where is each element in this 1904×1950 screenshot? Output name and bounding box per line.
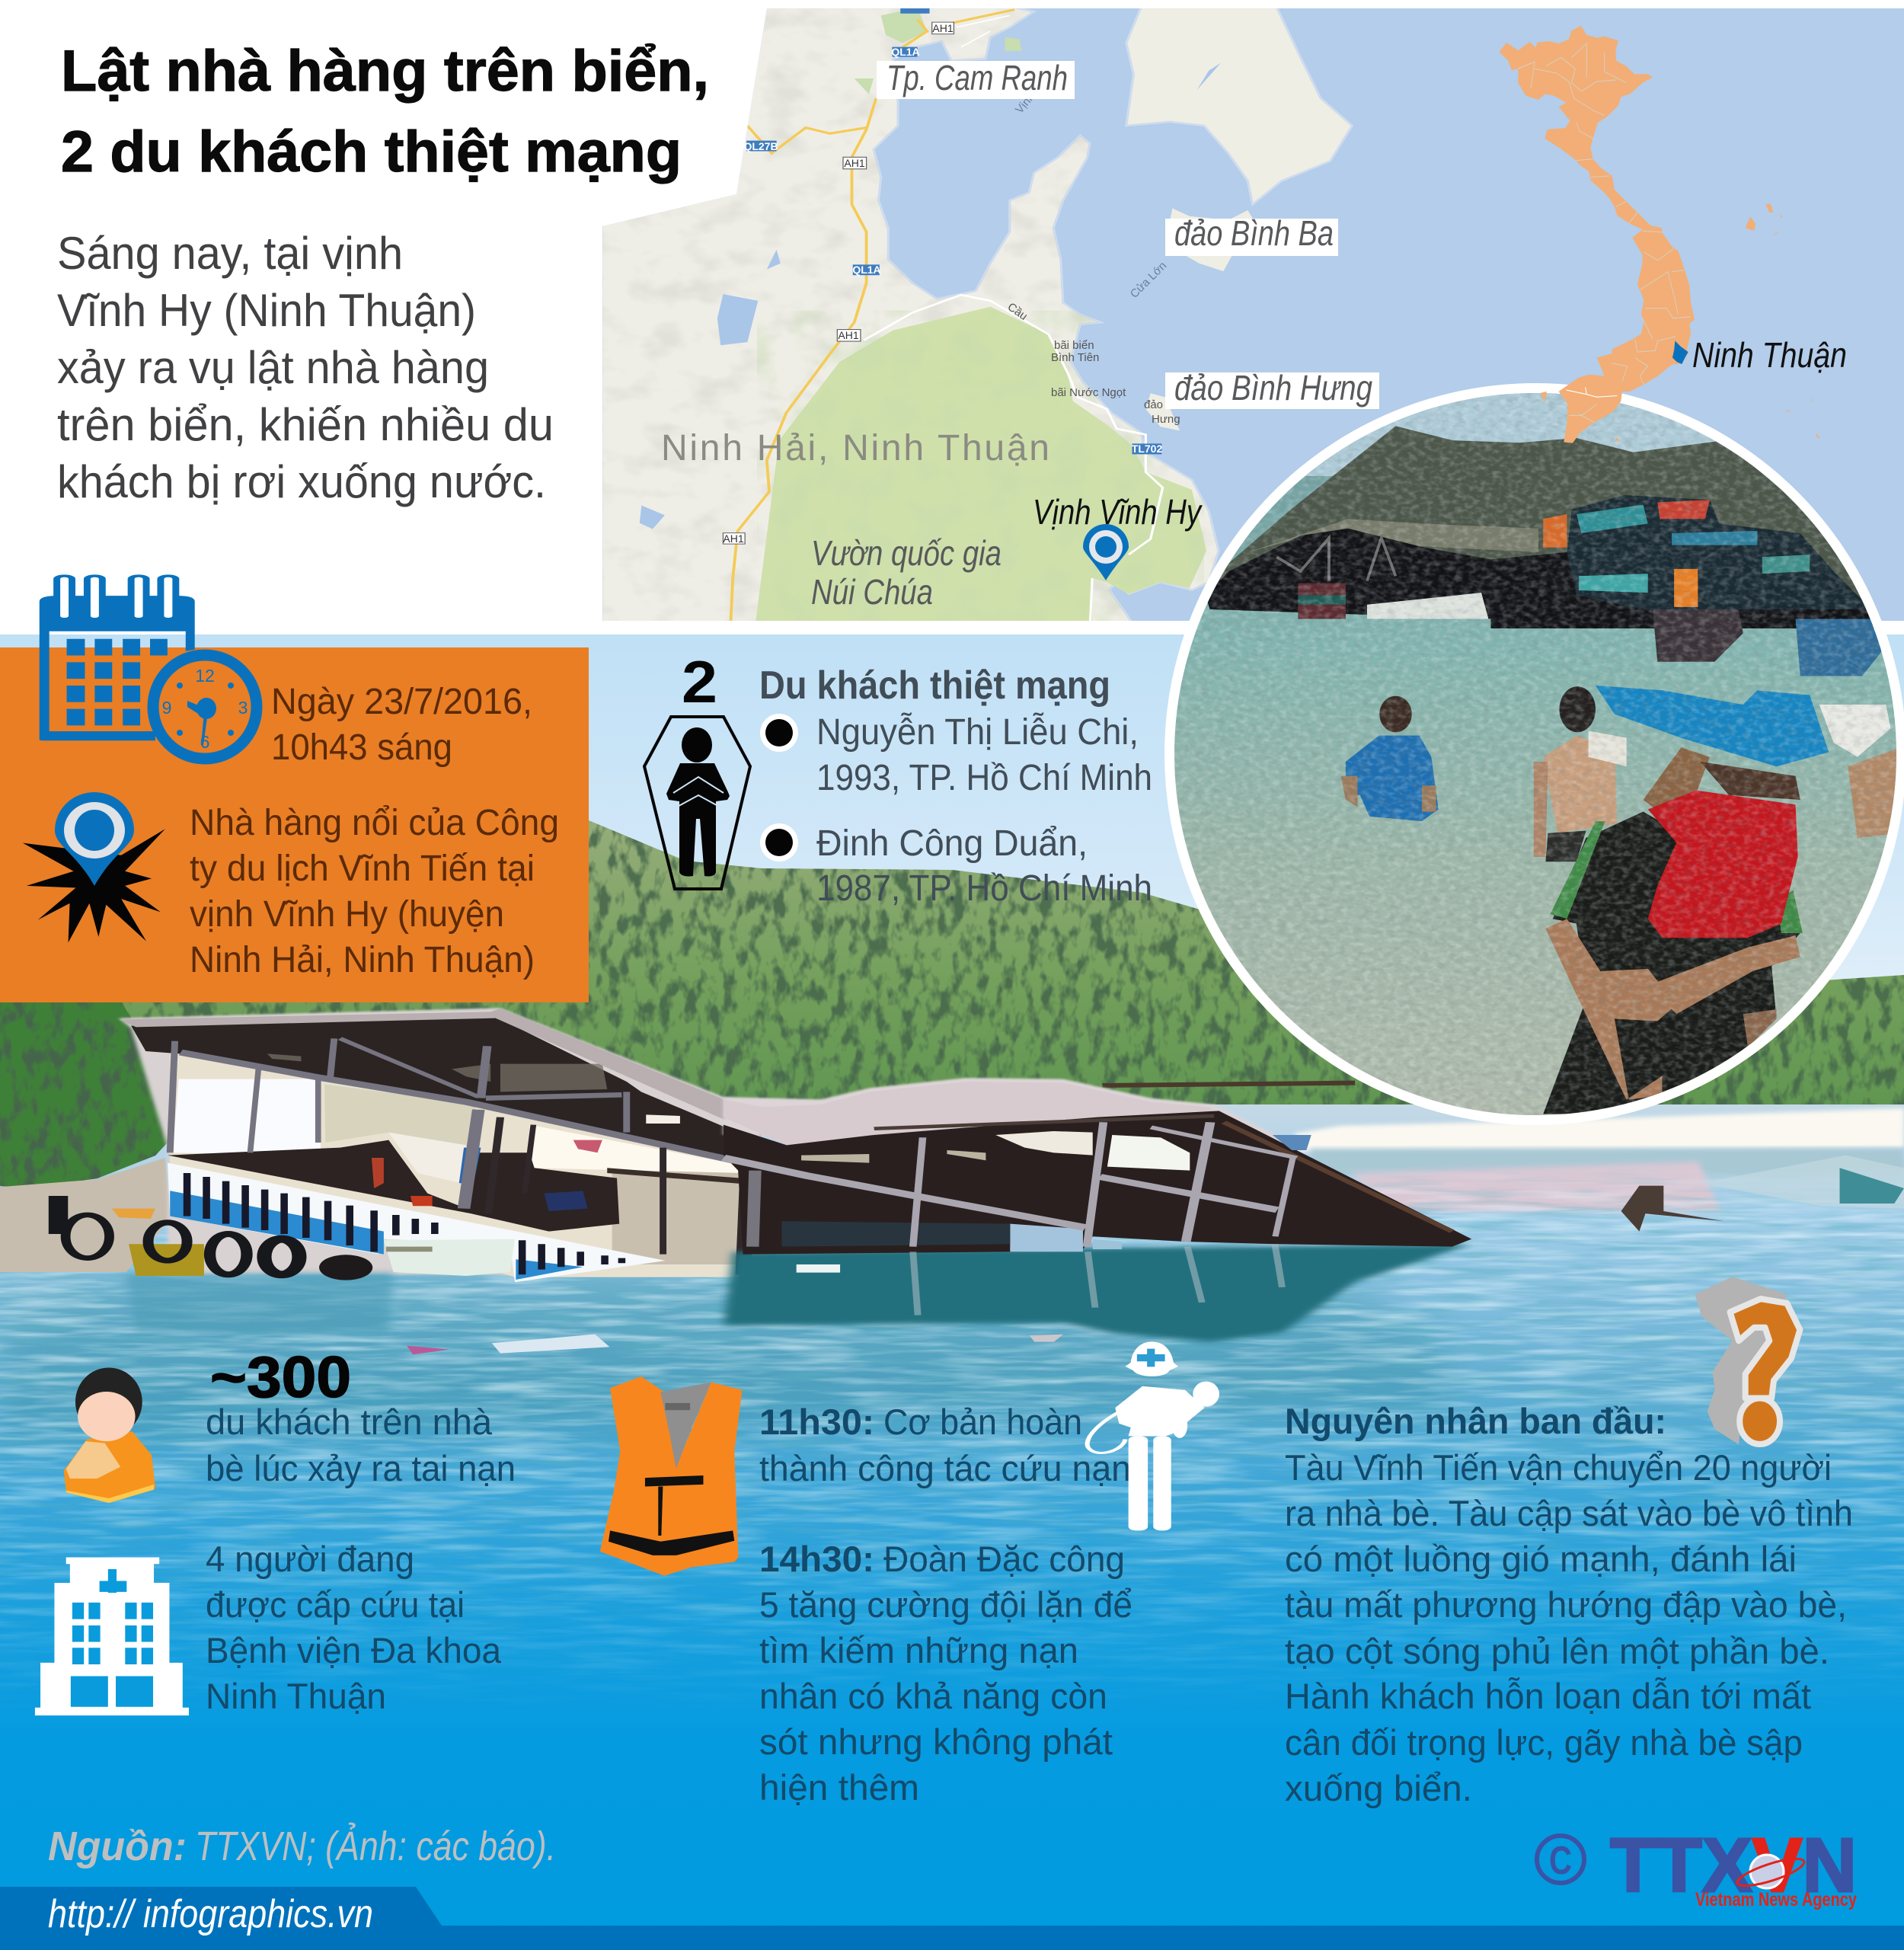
rescuer with black shirt	[1543, 812, 1800, 1114]
yellow roads	[730, 98, 876, 629]
sea photo background	[0, 1104, 1904, 1950]
intro text: khách bị rơi xuống nước.	[57, 456, 546, 507]
icon: question mark	[1695, 1277, 1800, 1444]
right part of the raft, traced in crop coordinates	[724, 1078, 1471, 1342]
national park	[755, 307, 1206, 629]
title	[61, 39, 709, 184]
reflection of deck	[126, 1272, 394, 1333]
small road numbers: AH1	[838, 329, 859, 341]
icon: calendar and clock: 9	[162, 698, 171, 718]
title: Lật nhà hàng trên biển,	[61, 39, 709, 104]
interior background	[170, 1051, 762, 1277]
text: date and time: 10h43 sáng	[271, 727, 452, 768]
stat: about 300 tourists: du khách trên nhà	[206, 1402, 493, 1442]
heading: dead tourists: Du khách thiệt mạng	[759, 663, 1110, 708]
icon: coffin with body	[644, 717, 750, 889]
map label: Vườn quốc gia Núi Chúa: Núi Chúa	[811, 572, 933, 612]
white panel	[1367, 593, 1488, 619]
small map labels: QL1A	[891, 46, 920, 58]
icon: hospital	[35, 1557, 189, 1715]
list: names of dead tourists: 1987, TP. Hồ Chí Minh	[816, 868, 1152, 909]
post reflections	[913, 1244, 1282, 1315]
list: names of dead tourists: Đinh Công Duẩn,	[816, 823, 1088, 864]
text: initial cause: có một luồng gió mạnh, đánh lái	[1285, 1539, 1797, 1579]
floating debris	[797, 1264, 840, 1273]
intro text: trên biển, khiến nhiều du	[57, 399, 554, 450]
face and hair	[1644, 747, 1710, 814]
text: injured in hospital: Bệnh viện Đa khoa	[206, 1630, 502, 1670]
text: location description: ty du lịch Vĩnh Tiến tại	[190, 849, 535, 889]
small road numbers	[723, 22, 954, 545]
map label: Tp. Cam Ranh: Tp. Cam Ranh	[887, 58, 1068, 98]
icon: calendar and clock: 12	[195, 666, 215, 686]
text: injured in hospital: 4 người đang	[206, 1539, 414, 1579]
circular photo: rescue in the water	[1158, 381, 1904, 1143]
small map labels: QL27B	[743, 140, 778, 152]
text: 11h30 rescue: 11h30:	[759, 1402, 874, 1442]
small map place names: bãi biển	[1054, 339, 1094, 352]
beam of fence behind	[1102, 1083, 1355, 1085]
blue hats	[1596, 686, 1829, 766]
text: 14h30 divers: nhân có khả năng còn	[759, 1676, 1107, 1716]
text: 14h30 divers: 5 tăng cường đội lặn để	[759, 1584, 1132, 1625]
grey beams	[170, 1038, 762, 1209]
text: location description: Nhà hàng nổi của Công	[190, 803, 559, 843]
list: names of dead tourists: Nguyễn Thị Liễu Chi,	[816, 711, 1139, 753]
arms	[1545, 919, 1676, 1100]
text: injured in hospital: Ninh Thuận	[206, 1676, 386, 1716]
text: initial cause	[1285, 1401, 1853, 1808]
intro text: xảy ra vụ lật nhà hàng	[57, 342, 489, 393]
text: initial cause: ra nhà bè. Tàu cập sát vào bè vô tình	[1285, 1493, 1853, 1533]
dark furniture	[168, 1140, 619, 1232]
source line: TTXVN; (Ảnh: các báo).	[195, 1823, 556, 1869]
text: 14h30 divers: 14h30:	[759, 1539, 874, 1579]
white roads	[864, 295, 1163, 555]
title: 2 du khách thiệt mạng	[61, 120, 682, 184]
boats	[1543, 514, 1567, 548]
text: initial cause: tạo cột sóng phủ lên một phần bè.	[1285, 1631, 1829, 1671]
land relief	[592, 8, 1223, 629]
stat: about 300 tourists	[206, 1345, 516, 1488]
small map place names: Cầu	[1005, 300, 1030, 323]
text: initial cause: xuống biển.	[1285, 1768, 1472, 1808]
map label: Ninh Hải, Ninh Thuận: Ninh Hải, Ninh Thuận	[661, 428, 1049, 468]
small map place names: bãi Nước Ngọt	[1051, 386, 1126, 399]
map panel	[592, 0, 1904, 629]
stat: about 300 tourists: ~300	[210, 1345, 351, 1410]
sky	[1253, 381, 1824, 476]
white boat	[384, 1239, 515, 1276]
right brown edge	[1224, 1122, 1452, 1232]
small map place names: đảo	[1144, 398, 1163, 411]
source line	[48, 1823, 556, 1869]
text: injured in hospital	[206, 1539, 502, 1716]
vietnam locator map	[1499, 26, 1820, 443]
map label: Vườn quốc gia Núi Chúa	[811, 533, 1002, 612]
grey beams and posts	[724, 1122, 1297, 1247]
text: 14h30 divers: Đoàn Đặc công	[883, 1539, 1125, 1579]
sand and left part of the raft, traced in crop coordinates	[0, 1008, 762, 1333]
list: names of dead tourists	[760, 711, 1152, 909]
white window	[172, 1079, 321, 1156]
map label: đảo Bình Ba: đảo Bình Ba	[1174, 213, 1334, 253]
pale roof edge	[119, 1009, 762, 1136]
text: date and time: Ngày 23/7/2016,	[271, 682, 532, 722]
logo: copyright and TTXVN: C	[1549, 1839, 1572, 1883]
grey-pink central roof	[724, 1082, 1214, 1145]
ninh thuan province highlight	[1672, 340, 1688, 364]
upper island	[1126, 8, 1352, 204]
small islands	[1145, 208, 1253, 430]
roof underside	[131, 1015, 762, 1163]
text: 14h30 divers: sót nhưng không phát	[759, 1721, 1113, 1762]
intro text	[57, 228, 554, 507]
text: initial cause: cân đối trọng lực, gãy nhà bè sập	[1285, 1722, 1803, 1763]
man in blue shirt	[1379, 696, 1412, 732]
child red shirt	[1648, 791, 1798, 938]
dark frame	[724, 1111, 1471, 1255]
deck with railing	[168, 1163, 666, 1282]
sand at the left	[0, 1158, 170, 1272]
small map place names	[1005, 91, 1180, 426]
logo: copyright and TTXVN: Vietnam News Agency	[1695, 1889, 1857, 1910]
sky band	[0, 635, 1904, 1031]
map label: đảo Bình Hưng: đảo Bình Hưng	[1174, 368, 1372, 408]
text: initial cause: tàu mất phương hướng đập vào bè,	[1285, 1584, 1847, 1625]
footer bar with url tab: http:// infographics.vn	[48, 1892, 373, 1936]
province borders	[1518, 43, 1691, 423]
mainland	[602, 8, 1219, 629]
footer bar with url tab	[0, 1887, 1904, 1950]
shirtless man	[1560, 686, 1596, 732]
icon: calendar and clock: 6	[200, 732, 209, 752]
people on raft	[1653, 609, 1743, 662]
text: location description: vịnh Vĩnh Hy (huyện	[190, 894, 504, 935]
pale halo of roof	[724, 1078, 1302, 1148]
logo: copyright and TTXVN: TTXVN	[1610, 1823, 1857, 1908]
text: location description	[190, 803, 559, 980]
stat: about 300 tourists: bè lúc xảy ra tai nạn	[206, 1448, 516, 1488]
lakes	[640, 62, 1221, 529]
icon: location pin with explosion	[23, 792, 165, 943]
small map place names: Cửa Lớn	[1128, 259, 1169, 301]
mekong delta borders	[1567, 387, 1617, 397]
white road shields	[723, 22, 954, 544]
photo: collapsed floating restaurant	[0, 1002, 1904, 1354]
small map place names: Vịnh	[1013, 91, 1037, 117]
text: initial cause: Hành khách hỗn loạn dẫn tới mất	[1285, 1676, 1811, 1716]
white cloth and man on the right	[1819, 705, 1890, 757]
intro text: Sáng nay, tại vịnh	[57, 228, 403, 279]
icon: calendar and clock	[40, 576, 257, 759]
text: initial cause: Tàu Vĩnh Tiến vận chuyển 20 người	[1285, 1447, 1832, 1488]
tires	[59, 1196, 299, 1274]
text: 14h30 divers	[759, 1539, 1132, 1808]
small road numbers: AH1	[844, 157, 865, 169]
list: names of dead tourists: 1993, TP. Hồ Chí Minh	[816, 758, 1152, 798]
text: 11h30 rescue: Cơ bản hoàn	[883, 1402, 1082, 1442]
trees at left of the raft	[0, 1002, 168, 1187]
small road numbers: AH1	[932, 22, 954, 34]
number of dead: 2	[682, 648, 717, 715]
text: date and time	[271, 682, 532, 768]
panel: orange time and place box	[0, 647, 589, 1002]
park relief	[757, 311, 1204, 629]
islands	[1541, 204, 1820, 441]
objects on the water at right	[407, 1156, 1904, 1354]
map label: Vườn quốc gia Núi Chúa: Vườn quốc gia	[811, 533, 1002, 573]
intro text: Vĩnh Hy (Ninh Thuận)	[57, 285, 476, 336]
text: initial cause: Nguyên nhân ban đầu:	[1285, 1401, 1666, 1441]
blue road shields	[746, 8, 1161, 454]
icon: map pin	[1083, 524, 1129, 580]
text: injured in hospital: được cấp cứu tại	[206, 1584, 465, 1625]
text: 11h30 rescue	[759, 1402, 1131, 1488]
small road numbers: AH1	[723, 532, 744, 545]
map label: Vịnh Vĩnh Hy: Vịnh Vĩnh Hy	[1033, 492, 1203, 532]
hillside photo	[122, 820, 1904, 1104]
reflection in the water	[724, 1244, 1471, 1342]
text: 14h30 divers: tìm kiếm những nạn	[759, 1630, 1078, 1670]
small map place names: Hưng	[1152, 413, 1180, 426]
mountain	[1215, 426, 1872, 609]
icon: rescuer carrying victim	[1088, 1341, 1219, 1530]
label: Ninh Thuận: Ninh Thuận	[1692, 335, 1847, 375]
light gaps	[995, 1131, 1093, 1156]
soft halo	[119, 1008, 762, 1274]
small map labels	[743, 46, 1162, 455]
yellow hull	[129, 1244, 204, 1276]
small map labels: QL1A	[852, 264, 881, 276]
text: location description: Ninh Hải, Ninh Thuận)	[190, 940, 535, 980]
railing bars	[187, 1173, 621, 1274]
small map labels: TL702	[1132, 443, 1162, 455]
green patches in town	[855, 8, 1022, 94]
small map place names: Bình Tiên	[1051, 351, 1099, 364]
raft frame	[1205, 529, 1881, 628]
icon: calendar and clock: 3	[238, 698, 248, 718]
icon: life vest	[600, 1376, 742, 1576]
text: 11h30 rescue: thành công tác cứu nạn	[759, 1448, 1131, 1488]
blue shelter on shore	[1273, 1135, 1311, 1150]
icon: tourist person	[64, 1367, 155, 1503]
text: 14h30 divers: hiện thêm	[759, 1767, 919, 1808]
source line: Nguồn:	[48, 1824, 187, 1869]
